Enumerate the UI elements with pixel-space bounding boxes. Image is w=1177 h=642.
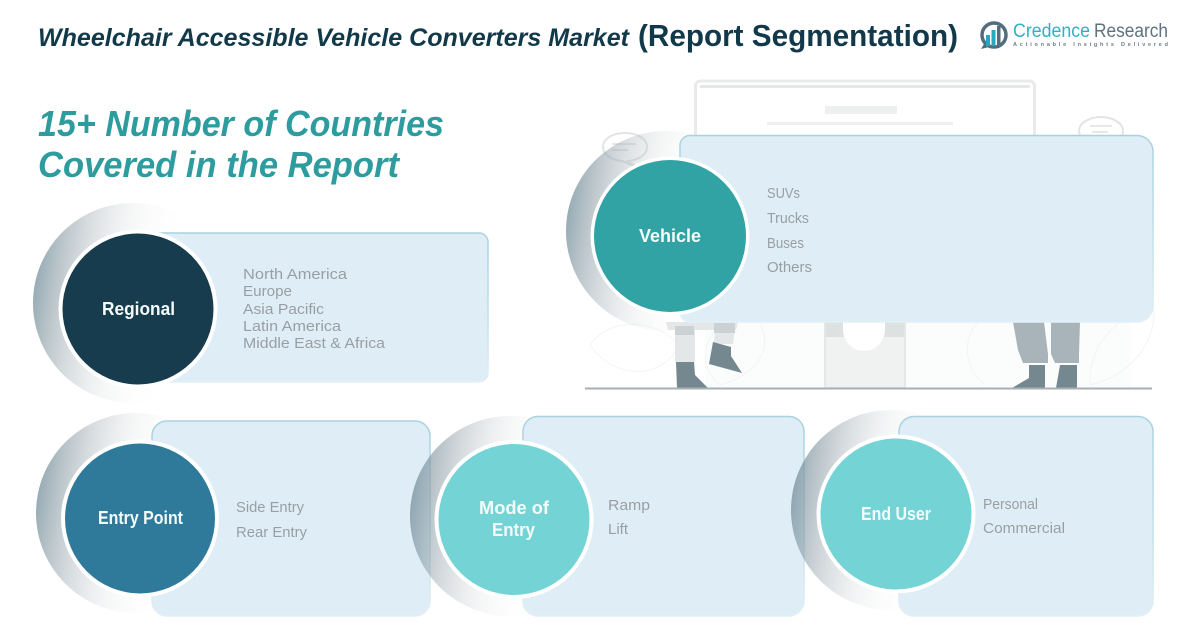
title xyxy=(38,18,958,53)
ring: Mode of Entry gradient arc xyxy=(410,416,610,616)
list: Regional segments: Middle East & Africa xyxy=(243,335,386,352)
list: End User segments: Personal xyxy=(983,496,1038,513)
illustration: faint backdrop board xyxy=(705,322,1130,387)
illustration: right person legs xyxy=(1012,322,1080,388)
list: Entry Point segments: Side Entry xyxy=(236,499,304,516)
badge: End User xyxy=(816,434,976,594)
panel: Regional xyxy=(33,203,488,403)
illustration: faint leaves xyxy=(590,310,1154,385)
list: End User segments xyxy=(983,496,1065,537)
panel: Entry Point xyxy=(36,413,430,616)
list: Regional segments xyxy=(243,266,386,352)
list: Entry Point segments: Rear Entry xyxy=(236,524,307,541)
card: Regional xyxy=(150,233,488,382)
title: (Report Segmentation) xyxy=(638,18,958,53)
list: Vehicle segments: Trucks xyxy=(767,210,809,227)
logo: Credence Research: Actionable Insights Delivered xyxy=(1013,42,1168,48)
badge: Vehicle: Vehicle xyxy=(639,226,701,246)
badge: Entry Point: Entry Point xyxy=(98,508,183,528)
list: Vehicle segments: SUVs xyxy=(767,185,800,202)
card: Mode of Entry xyxy=(523,416,804,616)
list: Regional segments: Europe xyxy=(243,283,292,300)
list: Vehicle segments: Buses xyxy=(767,235,804,252)
badge: End User: End User xyxy=(861,504,931,524)
card: Vehicle xyxy=(680,136,1153,322)
illustration: central column xyxy=(825,322,905,388)
list: Mode of Entry segments: Lift xyxy=(608,521,629,538)
ring: Regional gradient arc xyxy=(33,203,233,403)
badge: Regional: Regional xyxy=(102,299,175,319)
list: Mode of Entry segments xyxy=(608,497,650,538)
list: Vehicle segments xyxy=(767,185,812,276)
card: End User xyxy=(899,416,1153,616)
badge: Mode of Entry: Mode of xyxy=(479,498,550,518)
heading: countries covered: Covered in the Report xyxy=(38,144,401,185)
badge: Vehicle xyxy=(590,156,750,316)
list: Regional segments: North America xyxy=(243,266,348,283)
heading: countries covered xyxy=(38,103,444,185)
ring: End User gradient arc xyxy=(791,410,991,610)
illustration: right speech bubble xyxy=(1079,117,1123,145)
badge: Mode of Entry xyxy=(434,440,594,599)
panel: Vehicle xyxy=(566,131,1153,331)
list: Mode of Entry segments: Ramp xyxy=(608,497,650,514)
title: Wheelchair Accessible Vehicle Converters Market xyxy=(38,24,631,52)
background illustration: presentation screen with two people xyxy=(585,81,1154,390)
list: Entry Point segments xyxy=(236,499,307,541)
list: Regional segments: Latin America xyxy=(243,318,342,335)
badge: Mode of Entry: Entry xyxy=(492,520,535,540)
logo: Credence Research: Research xyxy=(1094,21,1168,42)
panel: Mode of Entry xyxy=(410,416,804,616)
illustration: left speech bubble xyxy=(603,133,647,167)
logo: Credence Research: Credence xyxy=(1013,21,1090,42)
illustration: monitor xyxy=(696,81,1034,151)
card: Entry Point xyxy=(152,421,430,616)
ring: Vehicle gradient arc xyxy=(566,131,766,331)
list: Vehicle segments: Others xyxy=(767,259,812,276)
heading: countries covered: 15+ Number of Countries xyxy=(38,103,444,144)
panel: End User xyxy=(791,410,1153,616)
logo: Credence Research xyxy=(981,21,1168,49)
icon: logo bar chart in ring xyxy=(981,23,1006,49)
ring: Entry Point gradient arc xyxy=(36,413,236,613)
illustration: ground line xyxy=(585,388,1152,390)
illustration: left person legs xyxy=(666,322,742,388)
badge: Regional xyxy=(58,230,218,388)
list: End User segments: Commercial xyxy=(983,520,1065,537)
list: Regional segments: Asia Pacific xyxy=(243,301,325,318)
badge: Entry Point xyxy=(61,440,219,598)
